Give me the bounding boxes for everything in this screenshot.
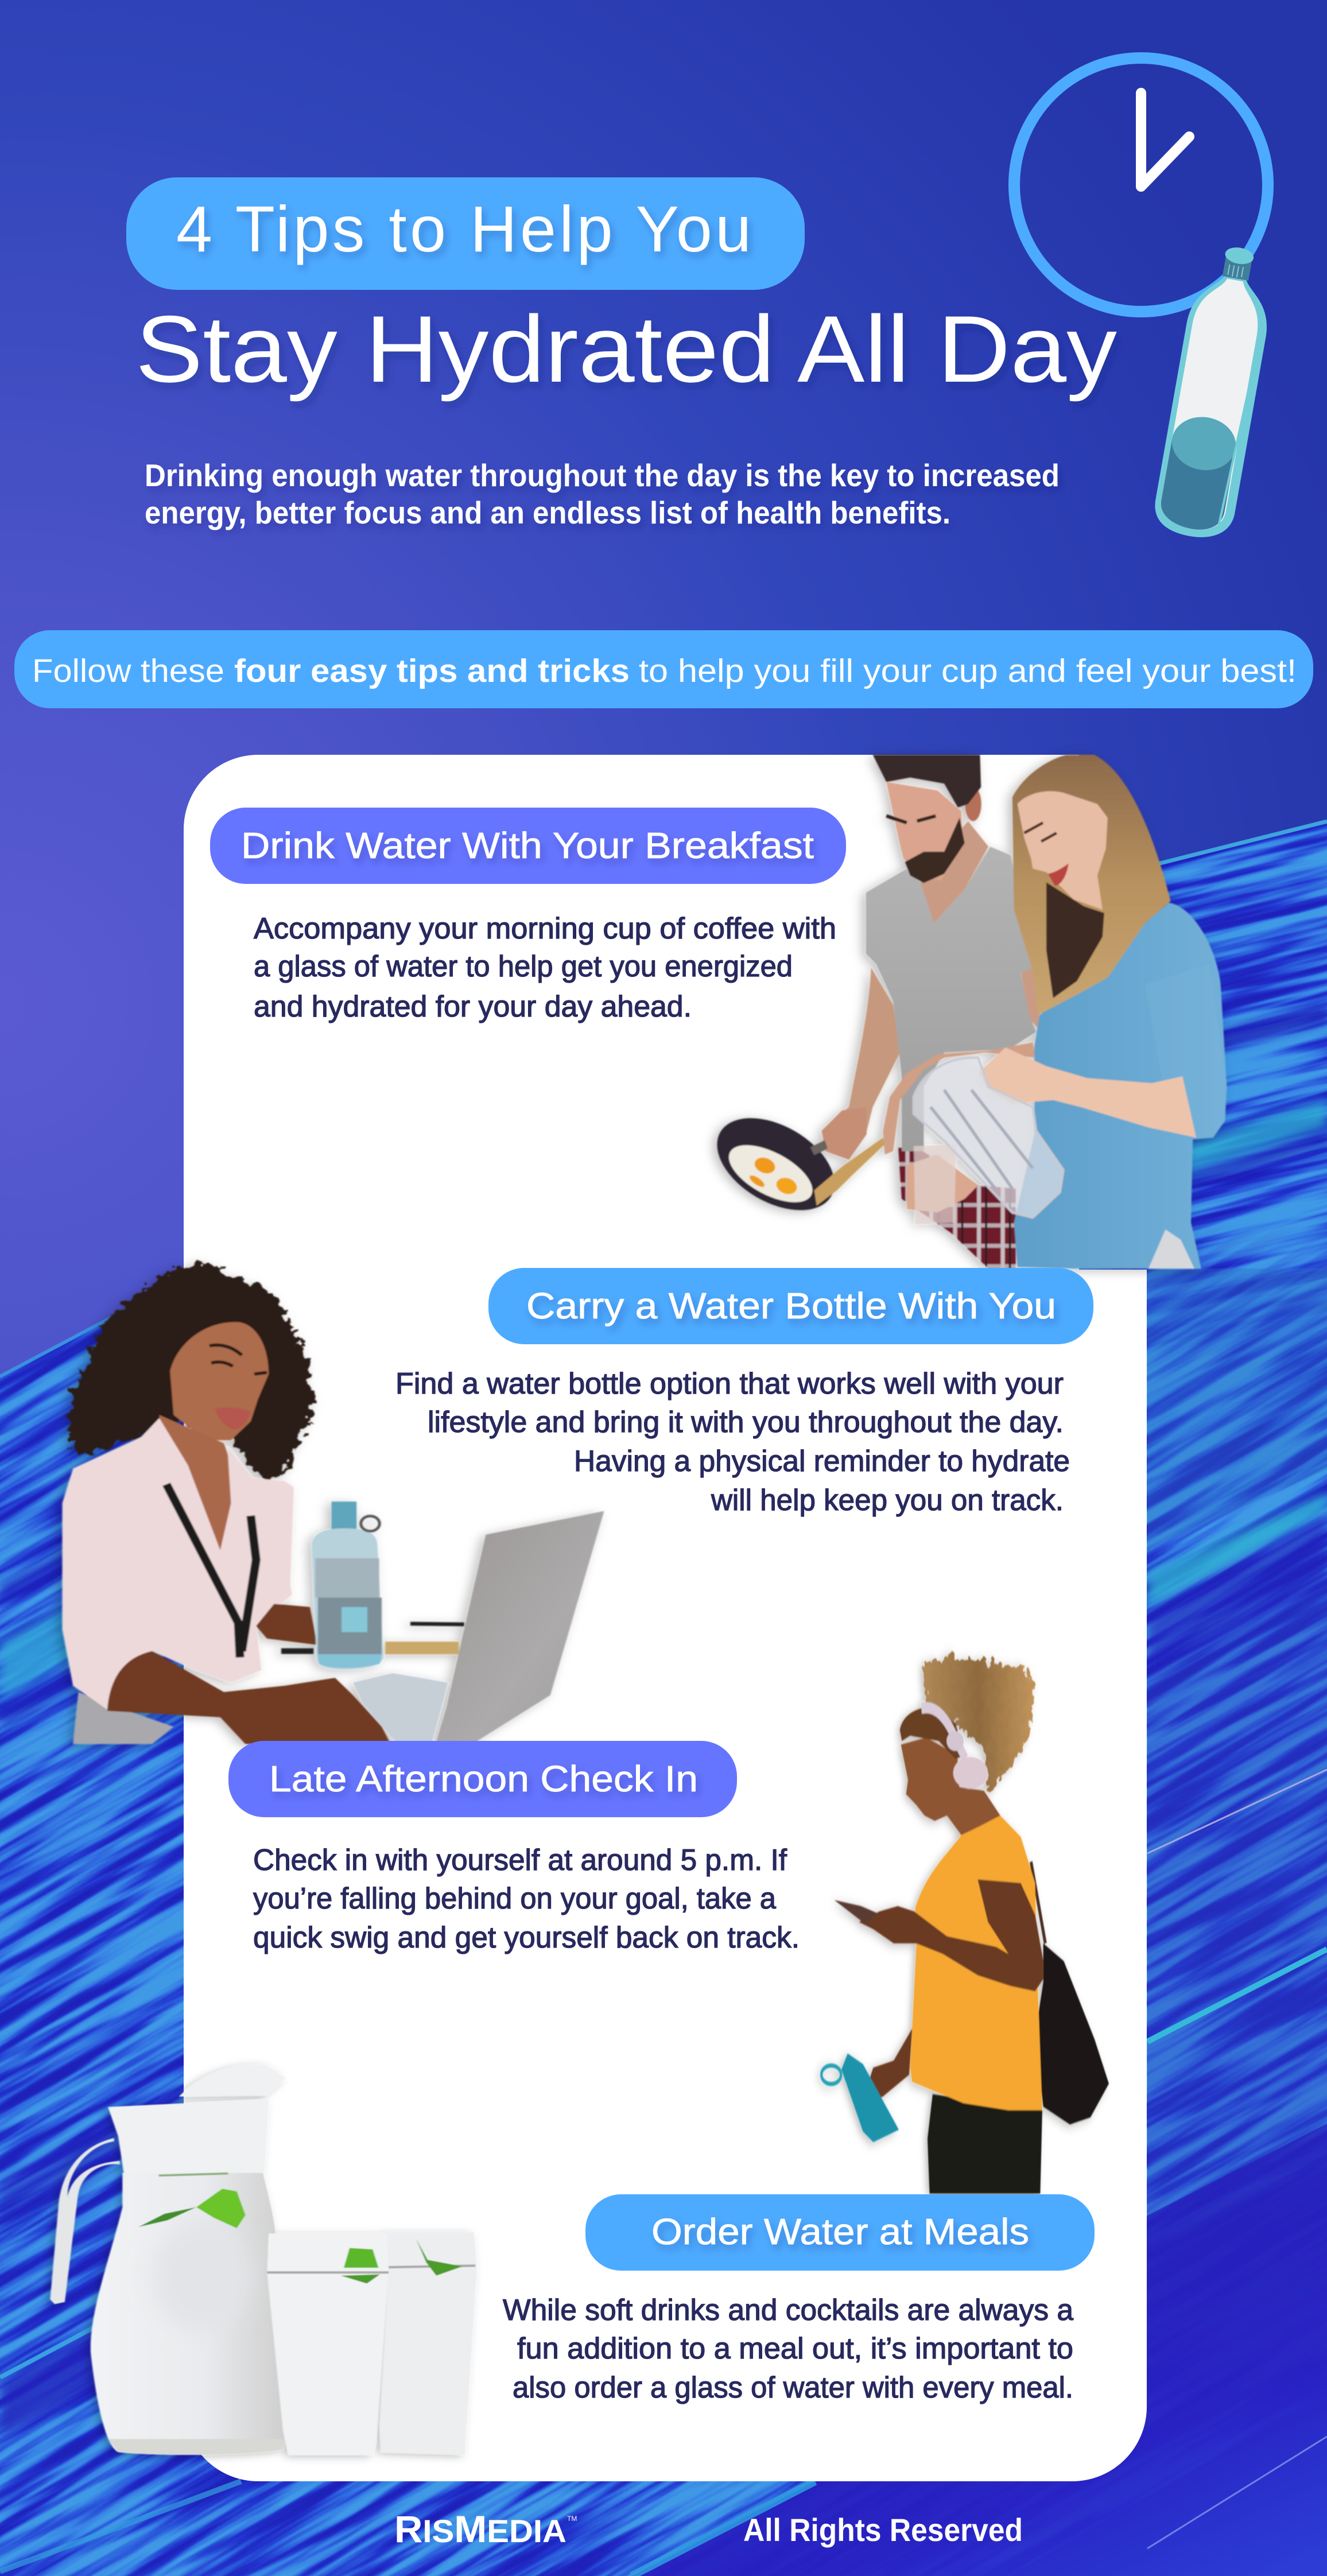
phone [835, 1900, 878, 1924]
tip 2 heading: Carry a Water Bottle With You [526, 1285, 1056, 1326]
tip 2 text: lifestyle and bring it with you throughout the day. [428, 1406, 1064, 1439]
tip 2 text: Find a water bottle option that works well with your [395, 1367, 1064, 1400]
photo: couple cooking [701, 755, 1227, 1268]
pitcher base [108, 2439, 283, 2455]
title: Stay Hydrated All Day [135, 296, 1118, 402]
typing arm [107, 1651, 391, 1744]
skirt [73, 1692, 173, 1744]
drinking glass [914, 1145, 956, 1224]
tip 4 heading: Order Water at Meals [651, 2211, 1029, 2252]
lips [215, 1407, 251, 1429]
notebook [281, 1624, 464, 1654]
blue bottle [821, 2054, 899, 2142]
tip 3 text: Check in with yourself at around 5 p.m. If [253, 1844, 787, 1877]
woman's face [1018, 791, 1108, 910]
other arm [256, 1604, 317, 1645]
logo: RISMedia: RISMEDIA [394, 2508, 567, 2550]
man's neck [921, 821, 988, 923]
forearm [883, 1042, 1036, 1155]
man's arm [822, 967, 900, 1159]
pill: follow these tips: Follow these [32, 653, 224, 689]
pants [928, 2094, 1042, 2194]
photo: woman at laptop [63, 1260, 604, 1744]
icon: water bottle [1150, 241, 1281, 543]
glass pitcher [914, 1057, 1064, 1217]
photo: pitcher and glasses [51, 2065, 477, 2455]
frying pan [701, 1099, 850, 1229]
mint leaf [138, 2174, 246, 2228]
strap [1031, 1862, 1045, 1943]
chest [160, 1415, 242, 1554]
tip 2 text: Having a physical reminder to hydrate [574, 1445, 1070, 1478]
face [170, 1322, 269, 1440]
man's far arm [1021, 967, 1041, 1032]
keyboard [353, 1673, 448, 1743]
intro text: Drinking enough water throughout the day is the key to increased [145, 457, 1060, 493]
pill: subtitle 4 tips: 4 Tips to Help You [176, 193, 751, 265]
tip 1 heading [210, 808, 846, 884]
man's ear [965, 787, 981, 821]
tall glass [380, 2232, 477, 2455]
man's face [886, 782, 963, 880]
woman's eyes [1024, 823, 1057, 841]
headphones [921, 1708, 988, 1789]
logo: RISMedia: TM [567, 2515, 577, 2523]
front hair [900, 1707, 965, 1759]
handle [51, 2138, 120, 2304]
woman's sweater [1014, 903, 1227, 1268]
tip 3 heading: Late Afternoon Check In [269, 1758, 698, 1799]
arm and hand [859, 1879, 1043, 1991]
man's beard [905, 818, 965, 883]
curly hair [922, 1656, 1034, 1794]
intro text: energy, better focus and an endless list of health benefits. [145, 495, 950, 530]
laptop [436, 1511, 604, 1744]
footer: rights reserved: All Rights Reserved [743, 2512, 1023, 2548]
woman's arm [978, 1048, 1196, 1138]
tip 3 text: you’re falling behind on your goal, take a [253, 1882, 776, 1915]
tip 3 heading [228, 1741, 737, 1817]
tip 1 text: and hydrated for your day ahead. [254, 990, 692, 1023]
spatula [814, 1138, 884, 1206]
tip 4 heading [585, 2194, 1095, 2271]
curly hair [68, 1260, 312, 1484]
sleeve shading [1145, 964, 1227, 1139]
glass leaves [341, 2239, 463, 2284]
intro text [145, 457, 1060, 530]
pill: follow these tips: four easy tips and tricks [234, 653, 630, 689]
tip 2 heading [488, 1268, 1093, 1344]
hand behind glass [907, 1155, 978, 1212]
tip 4 text: While soft drinks and cocktails are always a [503, 2294, 1073, 2327]
lower arm [863, 2028, 912, 2103]
woman's waist [1148, 1229, 1194, 1268]
tip 4 text: fun addition to a meal out, it’s important to [517, 2332, 1073, 2365]
icon: clock [1014, 58, 1268, 312]
shirt [910, 1815, 1042, 2111]
tip 2 text: will help keep you on track. [711, 1484, 1064, 1517]
spout [179, 2065, 286, 2097]
man's eyes [886, 816, 936, 823]
eyes and brows [209, 1345, 267, 1374]
photo: woman with phone [821, 1656, 1109, 2194]
man's hair [873, 755, 981, 808]
man's plaid trousers [898, 1148, 1016, 1268]
pill: follow these tips [14, 630, 1313, 708]
tip 2 text [395, 1367, 1070, 1517]
tip 1 text [254, 912, 836, 1023]
pitcher body [91, 2173, 284, 2455]
man's T-shirt [866, 847, 1036, 1151]
tip 3 text [253, 1844, 800, 1954]
pink shirt [63, 1418, 294, 1711]
lanyard [166, 1484, 256, 1658]
tip 1 text: a glass of water to help get you energized [254, 950, 793, 983]
water bottle [312, 1502, 383, 1669]
hair shadow [1046, 882, 1104, 998]
woman's hair [1012, 755, 1170, 1015]
tip 3 text: quick swig and get yourself back on track. [253, 1921, 800, 1954]
hand on pan [822, 1107, 867, 1159]
pitcher neck [108, 2099, 269, 2174]
face and neck [901, 1737, 1000, 1835]
glass water lines [267, 2265, 475, 2272]
pill: follow these tips: to help you fill your cup and feel your best! [639, 653, 1297, 689]
front glass [267, 2233, 389, 2455]
tip 4 text [503, 2294, 1073, 2404]
panel: white content card [184, 755, 1147, 2481]
tip 4 text: also order a glass of water with every meal. [513, 2371, 1073, 2404]
pill: subtitle 4 tips [126, 177, 805, 290]
tip 1 text: Accompany your morning cup of coffee with [254, 912, 836, 945]
ice shading [153, 2220, 251, 2331]
tip 1 heading: Drink Water With Your Breakfast [241, 825, 814, 866]
woman's lips [1048, 864, 1069, 886]
bag [1035, 1943, 1109, 2124]
